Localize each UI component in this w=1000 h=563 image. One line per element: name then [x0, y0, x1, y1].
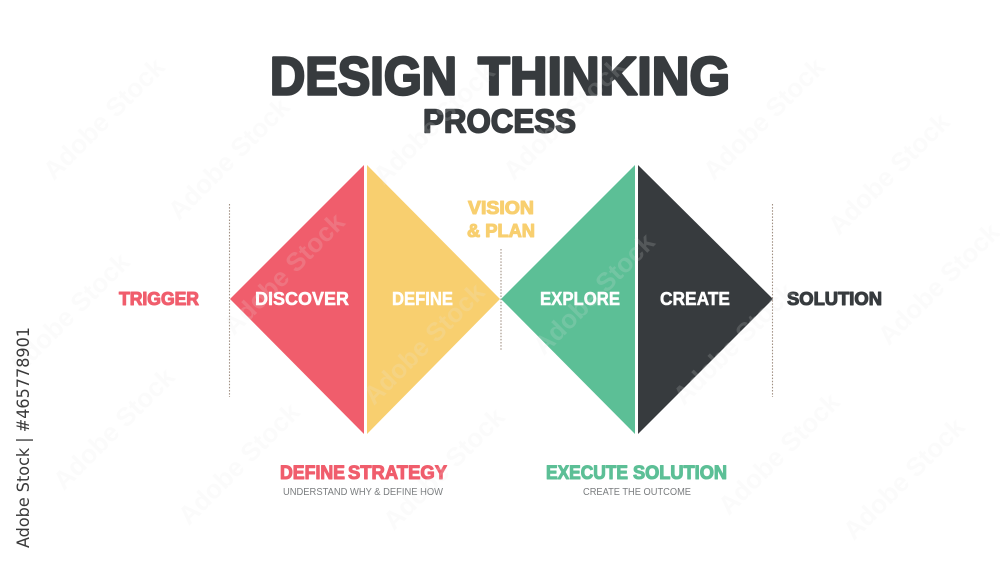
- triangle: explore: EXPLORE: [540, 289, 620, 309]
- label: vision and plan: [467, 198, 535, 241]
- heading: design thinking: DESIGN: [270, 46, 457, 106]
- label: solution: SOLUTION: [787, 289, 882, 309]
- label: vision and plan: & PLAN: [467, 221, 535, 241]
- text: Adobe Stock: [497, 51, 631, 185]
- text: Adobe Stock: [822, 106, 956, 240]
- triangle: discover: DISCOVER: [255, 289, 349, 309]
- double diamond chart: [230, 165, 773, 434]
- caption: define strategy: [280, 463, 447, 498]
- text: Adobe Stock: [172, 396, 306, 530]
- text: Adobe Stock: [37, 51, 171, 185]
- triangle: define: [367, 165, 500, 434]
- caption: execute solution: [546, 463, 727, 498]
- label: vision and plan: VISION: [468, 198, 534, 218]
- triangle: create: CREATE: [660, 289, 730, 309]
- text: Adobe Stock: [217, 206, 351, 340]
- heading: design thinking: [270, 46, 730, 106]
- text: Adobe Stock: [2, 246, 136, 380]
- heading: design thinking: THINKING: [478, 46, 730, 106]
- title: [270, 46, 730, 140]
- text: Adobe Stock: [837, 411, 971, 545]
- triangle: discover: [230, 165, 364, 434]
- caption: define strategy: UNDERSTAND WHY & DEFINE HOW: [283, 486, 443, 498]
- triangle: create: [638, 165, 773, 434]
- text: Adobe Stock: [357, 276, 491, 410]
- text: Adobe Stock: [162, 91, 296, 225]
- text: Adobe Stock: [377, 401, 511, 535]
- caption: execute solution: SOLUTION: [633, 463, 727, 484]
- text: Adobe Stock: [527, 226, 661, 360]
- caption: execute solution: CREATE THE OUTCOME: [583, 486, 691, 498]
- label: trigger: TRIGGER: [119, 289, 199, 309]
- text: Adobe Stock: [47, 361, 181, 495]
- stock credit text: Adobe Stock | #465778901: [14, 327, 34, 548]
- text: Adobe Stock: [667, 276, 801, 410]
- text: Adobe Stock: [697, 51, 831, 185]
- triangle: define: DEFINE: [392, 289, 453, 309]
- text: Adobe Stock: [712, 386, 846, 520]
- caption: define strategy: STRATEGY: [348, 463, 447, 484]
- caption: define strategy: DEFINE: [280, 463, 345, 484]
- caption: execute solution: EXECUTE: [546, 463, 628, 484]
- subheading: process: PROCESS: [423, 102, 576, 140]
- text: Adobe Stock: [367, 56, 501, 190]
- triangle: explore: [501, 165, 635, 434]
